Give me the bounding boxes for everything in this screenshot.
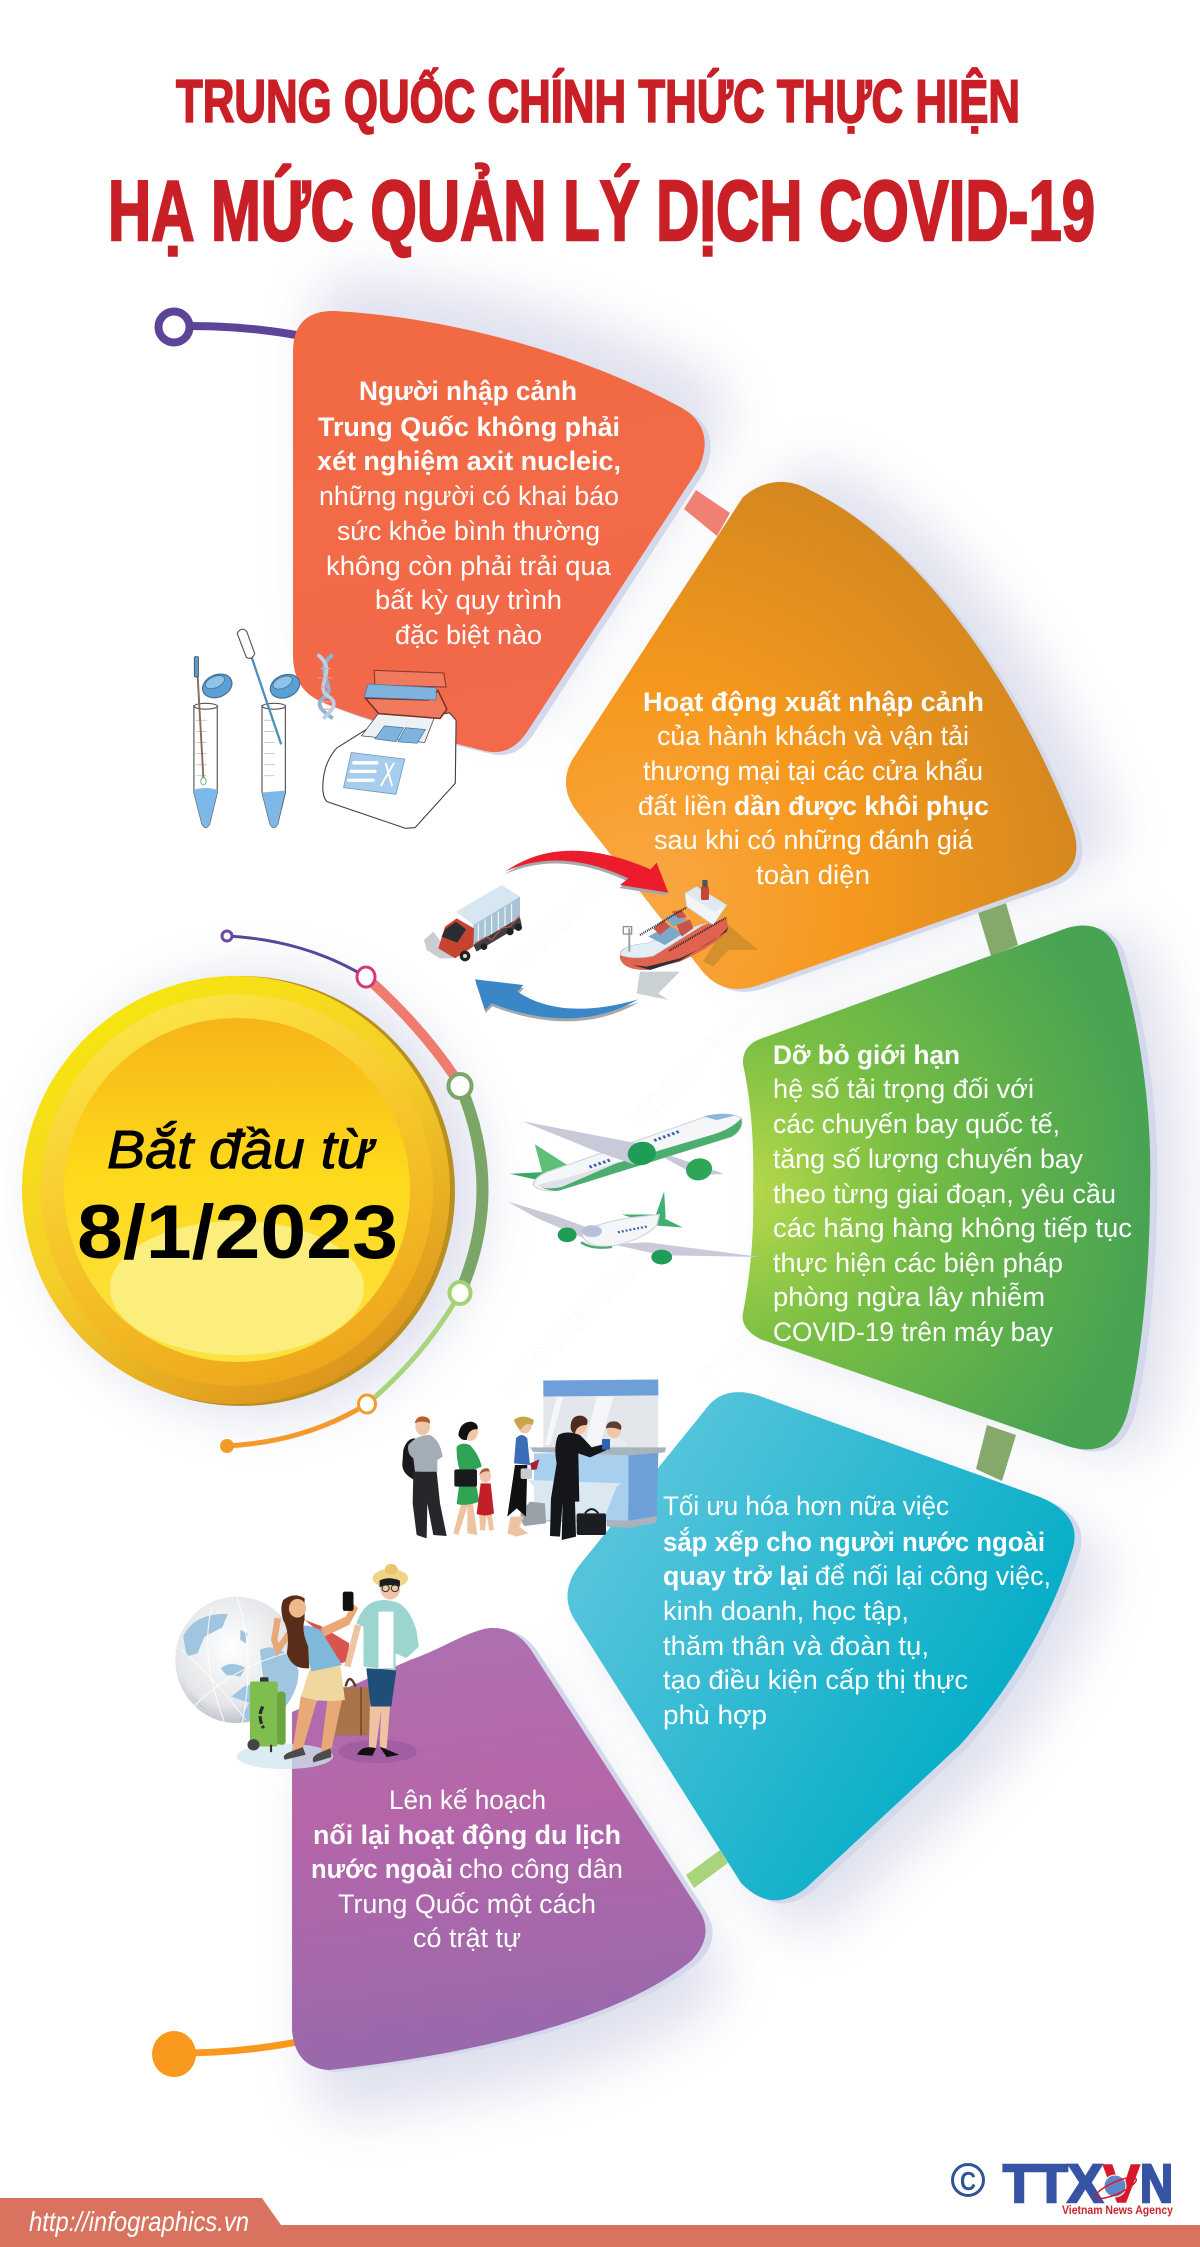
panel: outbound tourism: có trật tự: [413, 1923, 521, 1953]
connector handle: orange dot: [152, 2031, 297, 2077]
connector: coral: [684, 490, 730, 536]
icon: upper airplane: [510, 1114, 742, 1191]
panel: border crossing activity: thương mại tại các cửa khẩu: [643, 756, 983, 786]
panel: flight load limits: phòng ngừa lây nhiễm: [773, 1281, 1045, 1312]
panel: no nucleic acid test on entry: bất kỳ quy trình: [375, 585, 562, 615]
logo: TTXVN: N: [1140, 2154, 1173, 2214]
panel: border crossing activity: Hoạt động xuất nhập cảnh: [643, 687, 984, 717]
icon: counter: [528, 1379, 666, 1528]
panel: no nucleic acid test on entry: Người nhập cảnh: [359, 376, 577, 406]
icon: brown bag: [334, 1679, 371, 1735]
icon: woman and child: [453, 1422, 494, 1535]
icon: clerk: [606, 1421, 627, 1446]
panel: foreigners returning: Tối ưu hóa hơn nữa việc: [663, 1491, 949, 1521]
connector handle: purple ring: [158, 312, 296, 342]
icon: globe with travellers: [175, 1564, 419, 1769]
icon: ship: [620, 880, 758, 1000]
panel: no nucleic acid test on entry: những người có khai báo: [319, 481, 619, 511]
panel: flight load limits: COVID-19 trên máy bay: [773, 1317, 1053, 1347]
icon: lower airplane: [507, 1191, 761, 1264]
logo: TTXVN: Vietnam News Agency: [1062, 2205, 1174, 2217]
icon: man with hat: [347, 1564, 419, 1757]
connector: olive upper: [977, 900, 1018, 956]
panel: no nucleic acid test on entry: xét nghiệm axit nucleic,: [317, 446, 621, 476]
icon: suitcase: [247, 1677, 286, 1752]
title: [108, 68, 1095, 259]
date badge: [22, 976, 455, 1406]
panel: foreigners returning: [567, 1392, 1082, 1903]
panel: border crossing activity: của hành khách và vận tải: [657, 721, 969, 751]
date badge: 8/1/2023: [77, 1190, 398, 1275]
panel: flight load limits: thực hiện các biện pháp: [773, 1248, 1063, 1278]
panel: no nucleic acid test on entry: không còn phải trải qua: [326, 551, 612, 581]
logo: TTXVN: C: [960, 2166, 976, 2196]
panel: border crossing activity: [566, 482, 1082, 992]
logo: TTXVN: [952, 2154, 1174, 2217]
text: TTXVN - VNA: [693, 1257, 830, 1394]
logo: TTXVN: V: [1103, 2154, 1140, 2214]
icon: two green-trimmed airplanes: [507, 1114, 761, 1264]
panel: foreigners returning: sắp xếp cho người nước ngoài: [663, 1526, 1045, 1557]
source url: http://infographics.vn: [29, 2206, 249, 2237]
icon: passport control queue: [402, 1379, 666, 1540]
panel: border crossing activity: dần được khôi phục: [734, 791, 989, 821]
panel: no nucleic acid test on entry: sức khỏe bình thường: [337, 516, 600, 546]
panel: flight load limits: Dỡ bỏ giới hạn: [773, 1040, 960, 1070]
panel: outbound tourism: cho công dân: [459, 1854, 623, 1884]
panel: foreigners returning: phù hợp: [663, 1700, 767, 1730]
footer bar: [0, 2198, 1200, 2247]
panel: foreigners returning: để nối lại công việc,: [815, 1561, 1051, 1591]
icon: red arrow: [504, 851, 668, 896]
panel: outbound tourism: Trung Quốc một cách: [338, 1889, 596, 1919]
date badge: Bắt đầu từ: [107, 1120, 377, 1180]
panel: flight load limits: các chuyến bay quốc tế,: [773, 1109, 1060, 1139]
panel: border crossing activity: sau khi có những đánh giá: [654, 825, 974, 855]
icon: test tubes and PCR machine: [194, 629, 456, 828]
panel: outbound tourism: Lên kế hoạch: [389, 1785, 546, 1815]
icon: woman with passport: [507, 1417, 546, 1537]
connector: light green: [686, 1850, 728, 1888]
icon: woman taking selfie: [274, 1592, 358, 1762]
icon: man in black suit: [550, 1416, 610, 1540]
panel: flight load limits: [743, 926, 1157, 1451]
panel: foreigners returning: thăm thân và đoàn tụ,: [663, 1631, 929, 1661]
icon: blue arrow: [475, 979, 639, 1021]
panel: flight load limits: theo từng giai đoạn, yêu cầu: [773, 1179, 1116, 1209]
icon: globe: [175, 1597, 299, 1723]
icon: backpacker: [402, 1416, 447, 1538]
panel: flight load limits: các hãng hàng không tiếp tục: [773, 1213, 1132, 1243]
panel: no nucleic acid test on entry: [293, 311, 711, 755]
panel: foreigners returning: tạo điều kiện cấp thị thực: [663, 1665, 968, 1695]
panel: flight load limits: hệ số tải trọng đối với: [773, 1074, 1034, 1104]
logo: TTXVN: TTX: [1003, 2154, 1103, 2214]
panel: foreigners returning: quay trở lại: [663, 1561, 809, 1591]
connector: olive lower: [976, 1425, 1016, 1481]
text: TTXVN - VNA: [623, 997, 760, 1134]
panel: outbound tourism: nước ngoài: [311, 1854, 453, 1884]
panel: outbound tourism: [292, 1628, 713, 2072]
panel: border crossing activity: toàn diện: [756, 860, 870, 890]
panel: outbound tourism: nối lại hoạt động du lịch: [313, 1820, 621, 1850]
panel: no nucleic acid test on entry: đặc biệt nào: [395, 620, 542, 650]
icon: truck and ship with exchange arrows: [424, 851, 758, 1021]
panel: border crossing activity: đất liền: [638, 791, 727, 821]
panel: no nucleic acid test on entry: Trung Quốc không phải: [318, 412, 620, 442]
text: TTXVN - VNA: [313, 1287, 450, 1424]
icon: truck: [424, 885, 522, 961]
text: INFOGRAPHICS: [478, 842, 640, 1004]
text: INFOGRAPHICS: [493, 1242, 655, 1404]
panel: flight load limits: tăng số lượng chuyến bay: [773, 1144, 1083, 1174]
timeline arc around the date badge: [220, 931, 482, 1453]
panel: foreigners returning: kinh doanh, học tập,: [663, 1596, 909, 1626]
